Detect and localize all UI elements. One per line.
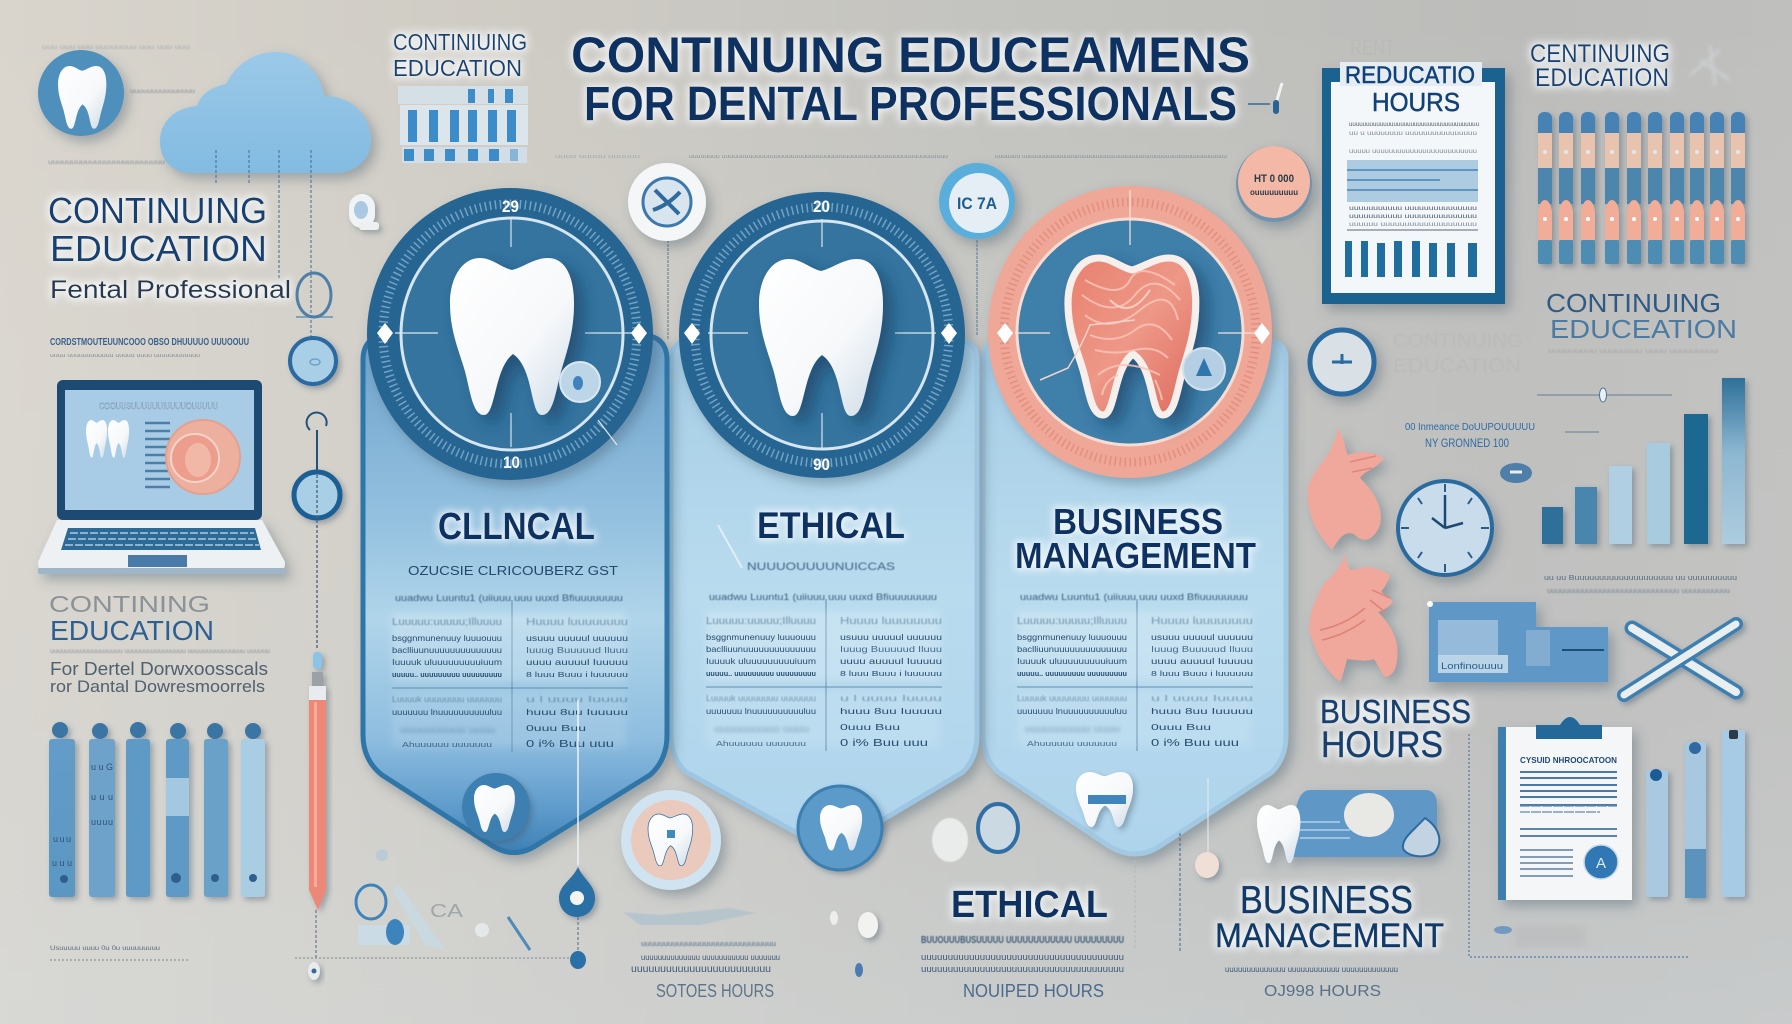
icon: clinical circle with tooth [367, 188, 653, 480]
heading: continuing education left: CONTINUING [48, 190, 267, 231]
slider [1537, 388, 1672, 402]
text block: clinical hours: uuuuuuuuuuuuuuuuuuuuuuuu [631, 964, 771, 975]
connector lines between circles [668, 240, 977, 340]
panel subtitle: ethical: NUUUOUUUUNUICCAS [747, 561, 895, 573]
text block: clinical hours: uuuuuuuuuuuuuuuuuuuuuuuuuuuuuu [641, 941, 776, 948]
document: reducation hours [1322, 35, 1505, 304]
icon: ethical circle with tooth [679, 192, 965, 478]
text under bar chart [1544, 575, 1737, 595]
caption right: 00 Inmeance DoUUPOUUUUU [1405, 422, 1535, 433]
heading: business hours: BUSINESS [1320, 693, 1471, 730]
caption right: NY GRONNED 100 [1425, 436, 1509, 450]
document: reducation hours: uu u uuuuuuuu uuuuuuuuuuuuuuuu [1349, 130, 1477, 137]
heading: continuing education right: EDUCEATION [1550, 314, 1737, 344]
panel heading: business management [1015, 501, 1256, 576]
icon: card [1427, 601, 1608, 682]
heading: continuing education left [48, 190, 291, 304]
heading: business hours [1320, 693, 1471, 765]
chart: ten dental pins [1538, 112, 1745, 264]
text block: ethical hours [921, 935, 1124, 1001]
heading: continuing education lower left [49, 591, 270, 696]
heading: continuing education lower left: ror Dantal Dowresmoorrels [50, 677, 265, 696]
faint footnote right [1494, 925, 1585, 947]
panel subtitle: clinical: OZUCSIE CLRICOUBERZ GST [408, 563, 618, 578]
text block: business hours [1225, 965, 1398, 1000]
icon: laptop [38, 380, 285, 574]
line and drop marker [559, 700, 595, 969]
document: reducation hours: uuuuuuuuuuu uuuuuuuuuuuuuuu [1349, 213, 1478, 220]
footnote left: Usuuuuu uuuu 0u 0u uuuuuuuuu [50, 946, 160, 952]
chart: three bars lower right [1646, 730, 1745, 898]
heading: continuing education right [1546, 288, 1737, 355]
icon: round dial [1310, 330, 1374, 394]
caption left [50, 337, 249, 359]
heading: business hours: HOURS [1321, 724, 1443, 765]
faded tools and dots [623, 908, 878, 977]
heading: continuing education top right [1530, 40, 1670, 92]
badge: blue code badge [939, 163, 1015, 239]
heading: continuing education lower left: EDUCATION [50, 615, 214, 646]
document: reducation hours: uuuuu uuuuuuuuuuuuuuuuuuuuuuuuu [1349, 148, 1477, 155]
panel heading: business management: MANAGEMENT [1015, 535, 1256, 576]
chart: six vertical bars left: uuG [91, 762, 113, 772]
icon: business circle with pulp tooth [988, 186, 1272, 478]
text block: business hours: OJ998 HOURS [1264, 983, 1381, 1000]
heading: continuing education lower left: uuuuuuuuuuuuuuuuuuu uuuuuuuuuuuuuuuu uuuuuuuuuuuuuuu uuuuuu [50, 649, 270, 655]
title: CONTINUING EDUCEAMENS [571, 27, 1250, 83]
dotted caption line under title: uuuuuuuu uuuuuuuuuuuuuuuuuuuuuuuuuuuuuuuuuuuuuuuuuuuuuuuuuuuuuuuuuuu [689, 154, 948, 160]
faint text behind cloud: uuu uuu uuu uuuuuuuu uuu uuu uuu [42, 45, 190, 51]
dotted caption line under title: uuuuuuu uuuuuuuuuuuuuuuuuuuuuuuuuuuuuuuuuuuuuuuuuuuuuuuuuuuuuuuuu [995, 154, 1227, 160]
document: reducation hours: uuuuuuuuuuuuuuuuuuuuuuuuuuuuuuuuuuuuuu [1349, 121, 1479, 128]
chart: six vertical bars left: uuu [53, 834, 71, 844]
icon: crossed toothbrushes [1624, 624, 1736, 695]
icon: clinical circle with tooth: 29 [502, 197, 519, 216]
icon: seal [1584, 845, 1618, 879]
icon: teeth on laptop screen [86, 420, 129, 458]
document: reducation hours: uuuuuu uuuuuuuuuuuuuuuuuuuu [1349, 221, 1478, 228]
icon: hook and magnifier [294, 413, 340, 650]
chart: rising bars [1542, 378, 1745, 544]
icon: ball and ring [932, 804, 1018, 862]
document: reducation hours: HOURS [1372, 87, 1460, 117]
badge: blue code badge: IC 7A [957, 194, 997, 213]
document: clipboard [1498, 717, 1632, 900]
icon: pink organ upper [1308, 428, 1384, 550]
document: reducation hours: uuuuuuuuuuu uuuuuuuuuuuuuuu [1349, 205, 1478, 212]
text block: clinical hours: SOTOES HOURS [656, 981, 774, 1001]
table: ethical [706, 592, 942, 751]
dashed axis right [1469, 734, 1690, 957]
faint ghost heading: EDUCATION [1393, 356, 1521, 377]
text block: ethical hours: uuuuuuuuuuuuuuuuuuuuuuuuuuuuuuuuuuuuuu [921, 964, 1124, 974]
text block: clinical hours: uuuuuuuuuuuuuu uuuuuuuuuuu uuuuuuu [641, 953, 780, 962]
heading: continuing education small top: CONTINIUING [393, 29, 527, 55]
heading: ethical lower: ETHICAL [951, 884, 1108, 926]
faint text behind cloud [42, 45, 195, 166]
icon: faint sparkle [1690, 45, 1730, 85]
icon: ethical circle with tooth: 20 [813, 197, 830, 216]
icon: cloud [160, 52, 371, 345]
lines and bead near panel 3 [1135, 778, 1219, 952]
chart: six vertical bars left: uuuu [91, 817, 113, 827]
badge: white tooth badge [628, 163, 706, 241]
faded instruments bottom left: CA [430, 901, 463, 921]
icon: tooth with band panel 3 [1076, 772, 1133, 827]
faint text behind cloud: uuuuuuuuuuuuuuu [130, 89, 195, 95]
chart: six vertical bars left: uuu [52, 858, 72, 868]
icon: lens [290, 338, 336, 384]
icon: blob [1500, 463, 1532, 483]
icon: ethical circle with tooth: 90 [813, 455, 830, 474]
heading: business management lower: BUSINESS [1240, 879, 1413, 922]
chart: six vertical bars left: uuu [91, 792, 113, 802]
dotted caption line under title: uuuu uuuuu uuuuuu [555, 154, 640, 160]
table: business management [1017, 592, 1253, 751]
caption left: CORDSTMOUTEUUNCOOO OBSO DHUUUUO UUUOOUU [50, 337, 249, 348]
faint text behind cloud: uuuuuuuuuuuuuuuuuuuuuuuuu [48, 160, 165, 166]
icon: clinical circle with tooth: 10 [503, 453, 520, 472]
heading: continuing education lower left: CONTINING [49, 591, 210, 617]
faint ghost heading: CONTINUING [1393, 331, 1523, 352]
heading: continuing education right: CONTINUING [1546, 288, 1721, 318]
text block: clinical hours [631, 941, 780, 1001]
heading: continuing education lower left: For Dertel Dorwxoosscals [50, 659, 268, 679]
icon: pink organ lower [1309, 552, 1397, 682]
heading: continuing education top right: CENTINUING [1530, 40, 1670, 68]
icon: card: Lonfinouuuu [1441, 661, 1503, 671]
heading: continuing education top right: EDUCATION [1535, 64, 1669, 92]
icon: pink circle on laptop screen [166, 420, 240, 494]
faint ghost heading [1393, 331, 1523, 377]
text block: business hours: uuuuuuuuuuuuuu uuuuuuuuuuuu uuuuuuuuuuuuu [1225, 965, 1398, 974]
icon: tooth badge panel 1 [462, 773, 530, 841]
icon: pin next to title [1248, 83, 1282, 114]
title [571, 27, 1250, 131]
text block: ethical hours: NOUIPED HOURS [963, 981, 1104, 1001]
heading: continuing education left: Fental Professional [50, 276, 291, 304]
text block: ethical hours: BUUOUUUBUSUUUUU UUUUUUUUUUUU UUUUUUUUU [921, 935, 1124, 946]
dotted caption line under title [555, 154, 1227, 160]
icon: tooth badge panel 2 [798, 786, 882, 870]
icon: tooth badge top left [38, 50, 124, 136]
badge: pink label: HT 0 000 [1254, 173, 1294, 185]
icon: salmon pen [309, 652, 326, 910]
panel: ethical card [671, 340, 977, 845]
text under bar chart: uu uu Buuuuuuuuuuuuuuuuuuuu uu uuuuuuuuuu [1544, 575, 1737, 582]
heading: continuing education small top [393, 29, 527, 81]
document: clipboard: CYSUID NHROOCATOON [1520, 755, 1617, 765]
icon: pink tooth badge [621, 790, 721, 890]
icon: seal: A [1596, 855, 1606, 872]
icon: clock [1398, 481, 1492, 575]
heading: business management lower [1215, 879, 1444, 955]
icon: hanging ring [296, 273, 333, 317]
panel subtitle: ethical [718, 525, 895, 573]
caption left: uuuu uuuuuuuuuuuu uuuuu uuuu uuuuuuuuuuuu [50, 353, 200, 359]
panel heading: clinical: CLLNCAL [438, 506, 595, 548]
faded instruments bottom left [356, 849, 530, 950]
badge: pink label: ouuuuuuuuu [1250, 188, 1298, 197]
heading: continuing education right: uuuuuuuuu uuuuuuuu uuuu uuuuuuuuu [1548, 349, 1718, 355]
heading: business management lower: MANACEMENT [1215, 917, 1444, 955]
heading: continuing education small top: EDUCATION [393, 55, 522, 81]
badge: pink label [1236, 146, 1312, 222]
text block: ethical hours: uuuuuuuuuuuuuuuuuuuuuuuuuuuuuuuuuuuuuu [921, 952, 1124, 962]
text under bar chart: uuuuuuuuuuuuuuuuuuuuuuuuuuuuuu uuuuuuuuuuu [1547, 588, 1730, 595]
table: clinical [392, 593, 628, 752]
panel: clinical card [363, 335, 667, 852]
icon: dental device [1257, 790, 1439, 863]
panel heading: business management: BUSINESS [1053, 501, 1223, 542]
icon: small device [349, 194, 379, 230]
line and marker under pen [308, 910, 320, 980]
chart: mini bar block [398, 86, 528, 163]
panel: business management card [983, 340, 1286, 854]
panel heading: ethical: ETHICAL [757, 505, 905, 546]
chart: bars on document [1345, 241, 1477, 277]
document: reducation hours: RENT [1350, 35, 1395, 60]
caption right [1405, 422, 1599, 450]
document: reducation hours: REDUCATIO [1345, 62, 1475, 89]
title: FOR DENTAL PROFESSIONALS [584, 78, 1237, 131]
icon: laptop: COOUUSUUUUUUIUUUUOUUUUU [99, 401, 218, 411]
chart: six vertical bars left [49, 722, 265, 897]
heading: continuing education left: EDUCATION [50, 228, 267, 269]
